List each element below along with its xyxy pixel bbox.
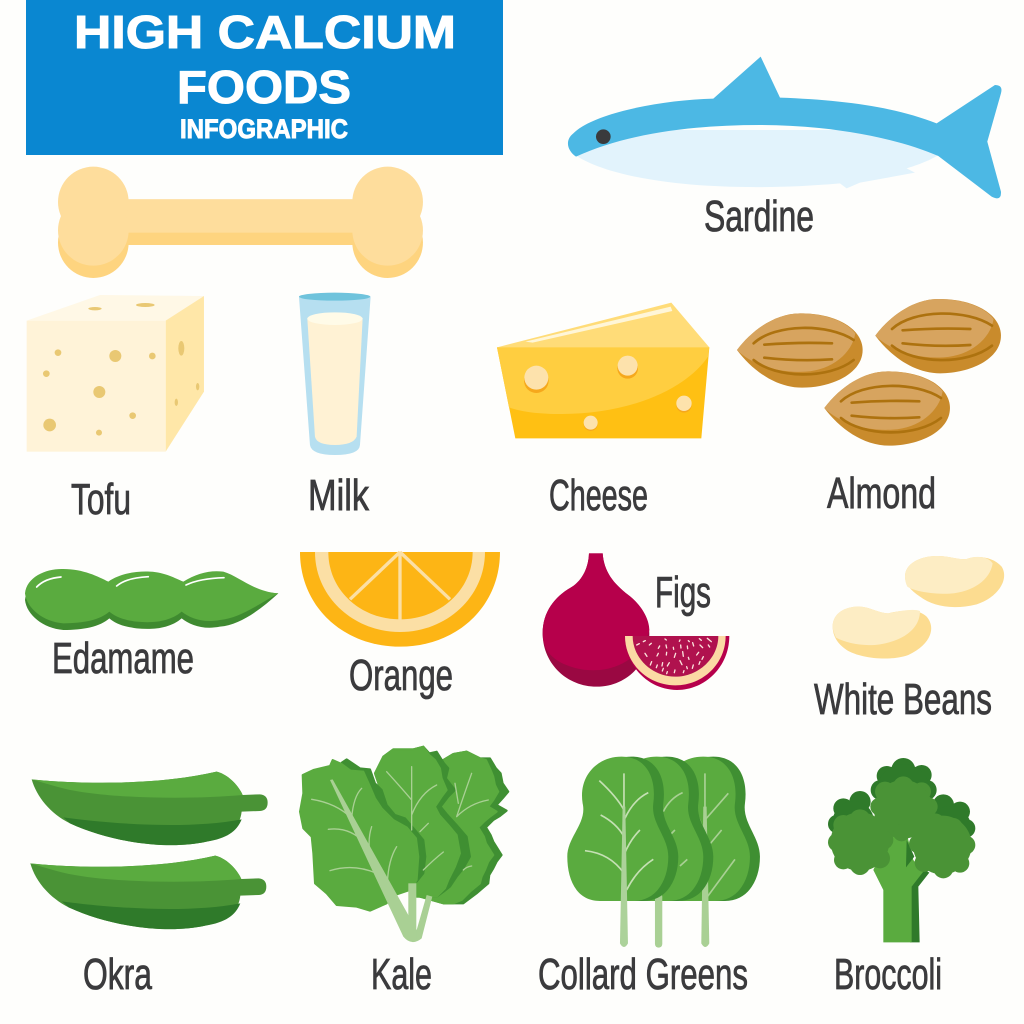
title banner	[26, 0, 503, 155]
icon: kale	[300, 747, 508, 942]
icon: cheese	[497, 303, 709, 438]
icon: almonds	[737, 299, 1001, 446]
label: Broccoli: Broccoli	[834, 950, 942, 999]
label: Almond: Almond	[827, 469, 936, 518]
icon: orange slice	[300, 552, 500, 647]
icon: collard greens	[567, 757, 760, 947]
icon: sardine	[568, 57, 1001, 198]
label: Milk: Milk	[308, 471, 370, 520]
label: Okra: Okra	[83, 950, 152, 999]
label: Edamame: Edamame	[52, 634, 194, 683]
icon: tofu	[27, 295, 204, 452]
icon: figs	[543, 553, 729, 690]
label: Orange: Orange	[349, 651, 453, 700]
label: Collard Greens: Collard Greens	[538, 950, 748, 999]
label: Tofu: Tofu	[71, 475, 131, 524]
subtitle: Infographic: INFOGRAPHIC	[180, 114, 348, 144]
icon: bone	[58, 167, 423, 278]
title: Foods: FOODS	[177, 61, 351, 113]
icon: broccoli	[828, 758, 975, 942]
icon: edamame	[25, 569, 278, 630]
title: High Calcium: HIGH CALCIUM	[74, 6, 456, 58]
label: Cheese: Cheese	[549, 471, 648, 520]
label: Kale: Kale	[371, 950, 432, 999]
label: Figs: Figs	[655, 568, 711, 617]
icon: okra	[30, 772, 268, 929]
label: Sardine: Sardine	[704, 192, 814, 241]
icon: glass of milk	[299, 293, 371, 455]
icon: white beans	[833, 556, 1004, 659]
